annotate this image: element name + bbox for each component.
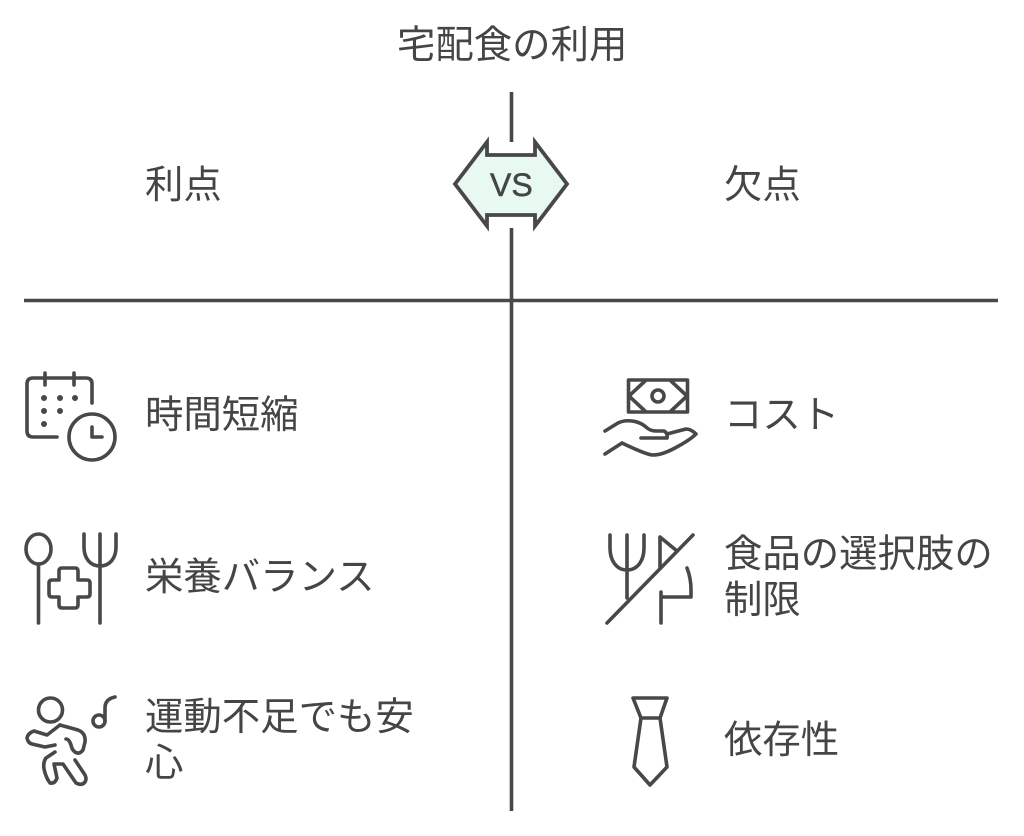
vertical divider top bbox=[510, 92, 513, 142]
benefit: peace of mind: 心 bbox=[145, 742, 183, 785]
benefit: peace of mind bbox=[145, 696, 414, 785]
benefit: nutrition balance: 栄養バランス bbox=[145, 556, 375, 599]
icon: calendar with clock bbox=[27, 373, 115, 460]
right heading: 欠点 bbox=[724, 164, 801, 207]
icon: running person with music note bbox=[27, 697, 115, 784]
icon: necktie bbox=[633, 698, 667, 785]
vertical divider bottom bbox=[510, 228, 513, 811]
title: 宅配食の利用 bbox=[397, 24, 627, 67]
benefit: peace of mind: 運動不足でも安 bbox=[145, 696, 414, 739]
drawback: limited food choice: 食品の選択肢の bbox=[724, 533, 993, 576]
icon: crossed-out fork and knife bbox=[607, 535, 693, 623]
VS label: VS bbox=[490, 167, 533, 203]
VS badge bbox=[455, 142, 567, 226]
drawback: limited food choice bbox=[724, 533, 993, 622]
drawback: dependency: 依存性 bbox=[724, 719, 839, 762]
drawback: cost: コスト bbox=[724, 394, 839, 437]
drawback: limited food choice: 制限 bbox=[724, 579, 801, 622]
horizontal divider bbox=[24, 299, 998, 302]
icon: spoon, fork and medical cross bbox=[26, 534, 116, 623]
icon: money over open hand bbox=[605, 380, 696, 455]
benefit: time saving: 時間短縮 bbox=[145, 394, 299, 437]
left heading: 利点 bbox=[145, 164, 222, 207]
